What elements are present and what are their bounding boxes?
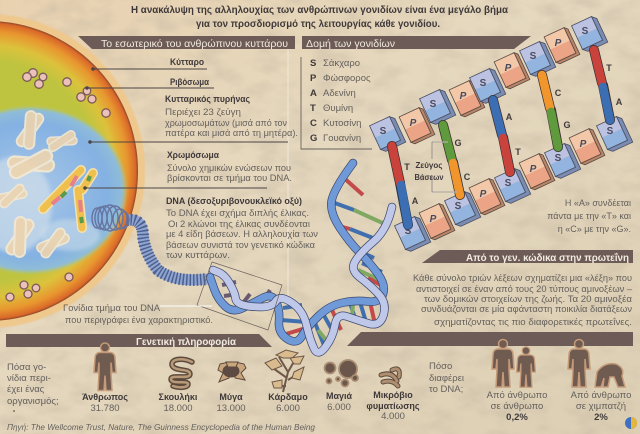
chromatin coil	[92, 205, 207, 280]
DNA double helix	[197, 163, 392, 352]
stat: tuberculosis	[366, 390, 420, 422]
legend: gene bases: T	[310, 103, 316, 114]
stat: worm: Σκουλήκι	[159, 392, 198, 402]
legend: gene bases: A	[310, 88, 317, 99]
text block: chromosome: Χρωμόσωμα	[167, 150, 219, 160]
stat: fly	[216, 392, 246, 414]
strands	[210, 163, 392, 352]
rung letters: A	[412, 196, 419, 206]
rung letters: G	[454, 138, 462, 148]
block letters	[380, 26, 614, 237]
legend: gene bases: P	[310, 73, 317, 84]
note: base pairing: η «C» με την «G».	[558, 224, 631, 234]
question: DNA difference: Πόσο	[429, 361, 452, 372]
note: base pairing: πάντα με την «Τ» και	[547, 211, 631, 221]
question: DNA difference: διαφέρει	[429, 373, 464, 384]
stat: fly: 13.000	[216, 403, 246, 414]
icon: worm	[171, 359, 192, 387]
base pair label: Βάσεων	[414, 172, 444, 182]
text block: nucleus: Κυτταρικός πυρήνας	[165, 94, 250, 104]
block letters: P	[580, 139, 587, 150]
caption: gene	[63, 303, 213, 325]
bottom strand blocks	[395, 115, 633, 253]
text block: chromosome	[167, 150, 292, 183]
stat: tuberculosis: Μικρόβιο	[373, 390, 413, 400]
legend: gene bases: C	[310, 118, 317, 129]
cell body	[0, 14, 145, 328]
stat: human to human: 0,2%	[506, 412, 528, 423]
rung letters: C	[555, 88, 562, 98]
block letters: P	[430, 214, 437, 225]
block letters: S	[505, 178, 512, 189]
text block: nucleus	[165, 94, 298, 138]
question: genes per organism: Πόσα γο-	[7, 362, 46, 373]
stat: yeast	[326, 391, 352, 413]
text block: DNA: Οι 2 κλώνοι της έλικας συνδέονται	[168, 219, 310, 229]
text block: nucleus: χρωμοσωμάτων (μισά από τον	[165, 118, 287, 128]
legend: gene bases: Γουανίνη	[323, 133, 361, 144]
text block: DNA: Το DNA έχει σχήμα διπλής έλικας.	[166, 208, 309, 218]
base pair rungs	[392, 50, 610, 225]
icon: publisher logo	[625, 417, 637, 429]
stat: worm	[159, 392, 198, 414]
caption: gene: Γονίδια τμήμα του DNA	[63, 303, 160, 313]
header bar: right part	[347, 332, 633, 346]
text block: code to protein: αντιστοιχεί σε έναν από τους 20 τύπους αμινοξέων –	[416, 284, 632, 294]
stat: human to chimp: Από άνθρωπο	[571, 390, 631, 401]
header: code to protein	[422, 250, 633, 264]
question: genes per organism: νίδια περι-	[7, 373, 51, 384]
legend: gene bases: Φώσφορος	[323, 73, 371, 84]
block letters: P	[505, 63, 512, 74]
question: genes per organism: οργανισμός;	[7, 396, 59, 407]
rung letters: T	[606, 63, 612, 73]
text block: chromosome: βρίσκονται σε τμήμα του DNA.	[167, 173, 292, 183]
text block: code to protein: των δομικών στοιχείων της ζωής. Τα 20 αμινοξέα	[424, 294, 632, 304]
stat: yeast: Μαγιά	[326, 391, 352, 401]
block letters: P	[410, 118, 417, 129]
text block: DNA: με 4 είδη βάσεων. Η αλληλουχία των	[166, 229, 319, 239]
rung letters: C	[464, 172, 471, 182]
block letters: P	[460, 91, 467, 102]
block letters: S	[480, 78, 487, 89]
stat: human to chimp: σε χιμπατζή	[576, 401, 626, 412]
legend: gene bases: Θυμίνη	[323, 103, 353, 114]
icon: human	[94, 343, 116, 390]
label: cell: Κύτταρο	[170, 57, 204, 67]
icon: fly	[218, 362, 246, 382]
icon: two humans	[492, 340, 535, 387]
block letters: S	[607, 126, 614, 137]
block letters: S	[582, 26, 589, 37]
text block: code to protein: συνδυάζονται σε μία αφάνταστη ποικιλία διατάξεων	[421, 304, 633, 314]
stat: cress: Κάρδαμο	[268, 392, 308, 402]
block letters: S	[530, 51, 537, 62]
header: cell interior: Το εσωτερικό του ανθρώπινου κυττάρου	[101, 38, 288, 50]
header: genetic information	[6, 334, 272, 348]
rung letters: T	[404, 162, 410, 172]
stat: human to chimp: 2%	[594, 412, 608, 423]
stat: human to human: σε άνθρωπο	[491, 401, 543, 412]
legend: gene bases	[301, 57, 372, 149]
block letters: S	[405, 226, 412, 237]
stat: human to chimp	[571, 390, 631, 423]
stat: cress	[268, 392, 308, 414]
rung letters: A	[506, 112, 513, 122]
stat: worm: 18.000	[163, 403, 193, 414]
rung letters	[404, 63, 623, 206]
top strand blocks	[370, 15, 608, 153]
block letters: P	[530, 164, 537, 175]
text block: chromosome: Σύνολο χημικών ενώσεων που	[167, 163, 291, 173]
block letters: S	[380, 126, 387, 137]
note: base pairing: Η «Α» συνδέεται	[565, 198, 631, 208]
block letters: S	[430, 99, 437, 110]
text block: code to protein: σχηματίζοντας τις πιο διαφορετικές πρωτεΐνες.	[434, 317, 632, 327]
stat: human	[82, 392, 128, 414]
icon: tuberculosis bacteria	[381, 369, 399, 386]
detail frame	[197, 262, 282, 330]
text block: code to protein	[413, 273, 633, 327]
stat: human: 31.780	[90, 403, 120, 414]
base pair label: Ζεύγος	[416, 160, 443, 170]
text block: DNA: των κυττάρων.	[166, 250, 230, 260]
ribosomes	[6, 69, 110, 301]
title	[131, 4, 509, 30]
stat: cress: 6.000	[276, 403, 300, 414]
text block: DNA: βάσεων συνιστά τον γενετικό κώδικα	[166, 240, 315, 250]
text block: code to protein: Κάθε σύνολο τριών λέξεων σχηματίζει μια «λέξη» που	[413, 273, 632, 283]
question: genes per organism	[7, 362, 59, 412]
block letters: S	[455, 201, 462, 212]
legend: gene bases: G	[310, 133, 317, 144]
legend: gene bases: Κυτοσίνη	[323, 118, 361, 129]
question: DNA difference	[429, 361, 464, 395]
icon: yeast	[324, 360, 358, 386]
base pair label	[414, 142, 457, 192]
legend: gene bases: S	[310, 58, 316, 69]
gene ladder diagram	[370, 15, 633, 253]
rungs	[222, 178, 387, 350]
title: Η ανακάλυψη της αλληλουχίας των ανθρώπινων γονιδίων είναι ένα μεγάλο βήμα	[131, 4, 509, 16]
leader lines	[84, 68, 288, 189]
header: genetic information: Γενετική πληροφορία	[136, 336, 237, 348]
rung letters: T	[515, 147, 521, 157]
stat: human to human: Από άνθρωπο	[487, 390, 547, 401]
legend: gene bases: Σάκχαρο	[323, 58, 360, 69]
title: για τον προσδιορισμό της λειτουργίας κάθε γονιδίου.	[196, 18, 440, 30]
header: code to protein: Από το γεν. κώδικα στην πρωτεΐνη	[466, 252, 629, 264]
note: base pairing	[547, 198, 631, 234]
block letters: S	[555, 153, 562, 164]
block letters: P	[480, 189, 487, 200]
header: gene structure	[302, 36, 531, 50]
stat: human: Άνθρωπος	[82, 392, 128, 402]
text block: DNA	[166, 196, 319, 260]
stat: human to human	[487, 390, 547, 423]
rung letters: G	[563, 120, 571, 130]
header: gene structure: Δομή των γονιδίων	[306, 38, 395, 50]
rung letters: A	[616, 97, 623, 107]
label: ribosome: Ριβόσωμα	[170, 77, 209, 87]
question: genes per organism: έχει ένας	[7, 384, 45, 395]
question: DNA difference: το DNA;	[429, 384, 463, 395]
legend: gene bases: Αδενίνη	[323, 88, 356, 99]
nucleus	[0, 106, 127, 274]
caption: gene: που περιγράφει ένα χαρακτηριστικό.	[65, 315, 213, 325]
stat: tuberculosis: φυματίωσης	[366, 401, 420, 411]
source: Πηγή: The Wellcome Trust, Nature, The Guinness Encyclopedia of the Human Being	[7, 423, 316, 432]
chromosomes	[0, 108, 79, 261]
icon: cress plant	[265, 350, 304, 392]
icon: human and chimp	[568, 340, 625, 387]
text block: nucleus: πατέρα και μισά από τη μητέρα).	[165, 128, 298, 138]
stat: yeast: 6.000	[327, 402, 351, 413]
text block: DNA: DNA (δεσοξυριβονουκλεϊκό οξύ)	[166, 196, 302, 206]
panel: cell illustration	[0, 14, 207, 328]
block letters: P	[555, 38, 562, 49]
stat: fly: Μύγα	[219, 392, 243, 402]
highlighted chromosome	[43, 170, 93, 228]
text block: nucleus: Περιέχει 23 ζεύγη	[165, 107, 241, 117]
stat: tuberculosis: 4.000	[381, 411, 405, 422]
